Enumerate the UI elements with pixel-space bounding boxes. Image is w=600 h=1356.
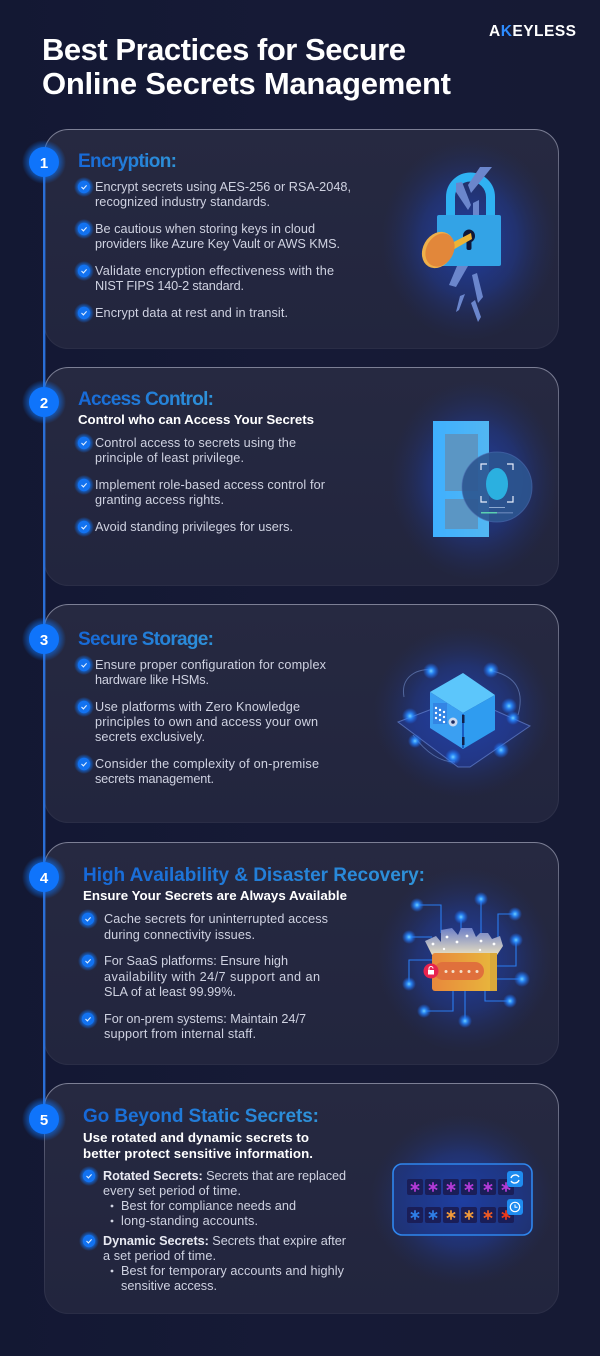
list: encryption points: providers like Azure Key Vault or AWS KMS. [95,237,340,251]
illustration: door with fingerprint [390,380,560,580]
list: encryption points [74,177,351,323]
list: encryption points: Encrypt data at rest and in transit. [95,306,288,320]
step badge 4: 4 [40,870,49,887]
heading: encryption: Encryption: [78,151,177,172]
step badge 3 [22,617,66,661]
list: access control points: Control access to secrets using the [95,436,296,450]
list: secure storage points: hardware like HSMs. [95,673,209,687]
subheading: high availability: Ensure Your Secrets are Always Available [83,888,347,903]
list: rotated and dynamic secrets [79,1166,347,1293]
list: access control points: Implement role-based access control for [95,478,326,492]
list: high availability points: availability with 24/7 support and an [104,970,320,984]
list: encryption points: Be cautious when storing keys in cloud [95,222,315,236]
list: secure storage points: secrets management. [95,772,214,786]
list: encryption points: NIST FIPS 140-2 standard. [95,279,244,293]
heading: secure storage: Secure Storage: [78,629,214,650]
subheading: access control: Control who can Access Your Secrets [78,412,314,427]
list: encryption points: recognized industry standards. [95,195,270,209]
panel: encryption [44,130,558,348]
list: secure storage points: Ensure proper configuration for complex [95,658,327,672]
list: rotated and dynamic secrets: every set period of time. [103,1184,241,1198]
step badge 4 [22,855,66,899]
panel: beyond static secrets [44,1084,558,1314]
step badge 1: 1 [40,155,48,172]
heading: access control: Access Control: [78,389,214,410]
list: secure storage points: Use platforms with Zero Knowledge [95,700,300,714]
step badge 2: 2 [40,395,48,412]
step badge 3: 3 [40,632,48,649]
subheading: beyond static secrets: better protect sensitive information. [83,1146,313,1161]
list: rotated and dynamic secrets: Best for compliance needs and [121,1199,296,1213]
list: rotated and dynamic secrets: sensitive access. [121,1279,217,1293]
list: access control points: granting access rights. [95,493,224,507]
list: high availability points: Cache secrets for uninterrupted access [104,912,328,926]
list: secure storage points [74,655,327,786]
timeline line [43,162,45,1120]
list: encryption points: Validate encryption effectiveness with the [95,264,334,278]
heading: beyond static secrets: Go Beyond Static Secrets: [83,1106,319,1127]
subheading: beyond static secrets [83,1130,313,1161]
step badge 5 [22,1097,66,1141]
heading: high availability: High Availability & Disaster Recovery: [83,865,425,886]
list: secure storage points: secrets exclusively. [95,730,205,744]
title [42,32,451,101]
list: rotated and dynamic secrets: a set period of time. [103,1249,216,1263]
list: access control points [74,433,326,537]
panel: secure storage [44,604,558,822]
list: rotated and dynamic secrets: Dynamic Secrets: Secrets that expire after [103,1234,347,1248]
list: rotated and dynamic secrets: Best for temporary accounts and highly [121,1264,345,1278]
list: high availability points: during connectivity issues. [104,928,255,942]
list: encryption points: Encrypt secrets using AES-256 or RSA-2048, [95,180,351,194]
illustration: safe on platform [373,627,553,797]
title: Online Secrets Management [42,66,451,101]
list: access control points: Avoid standing privileges for users. [95,520,293,534]
list: rotated and dynamic secrets: long-standing accounts. [121,1214,258,1228]
step badge 1 [22,140,66,184]
logo: Akeyless: AKEYLESS [489,23,576,40]
step badge 2 [22,380,66,424]
panel: access control [44,368,560,586]
list: high availability points: SLA of at least 99.99%. [104,985,236,999]
list: high availability points: For SaaS platforms: Ensure high [104,954,288,968]
illustration: rotating secrets [370,1115,554,1285]
subheading: beyond static secrets: Use rotated and dynamic secrets to [83,1130,309,1145]
illustration: padlock and key [381,140,557,340]
illustration: vault with circuits [377,868,553,1052]
list: high availability points: support from internal staff. [104,1027,256,1041]
list: secure storage points: principles to own and access your own [95,715,318,729]
list: rotated and dynamic secrets: Rotated Secrets: Secrets that are replaced [103,1169,346,1183]
list: high availability points: For on-prem systems: Maintain 24/7 [104,1012,306,1026]
list: secure storage points: Consider the complexity of on-premise [95,757,319,771]
list: access control points: principle of least privilege. [95,451,244,465]
title: Best Practices for Secure [42,32,406,67]
step badge 5: 5 [40,1112,48,1129]
panel: high availability [44,842,558,1064]
list: high availability points [78,909,328,1041]
